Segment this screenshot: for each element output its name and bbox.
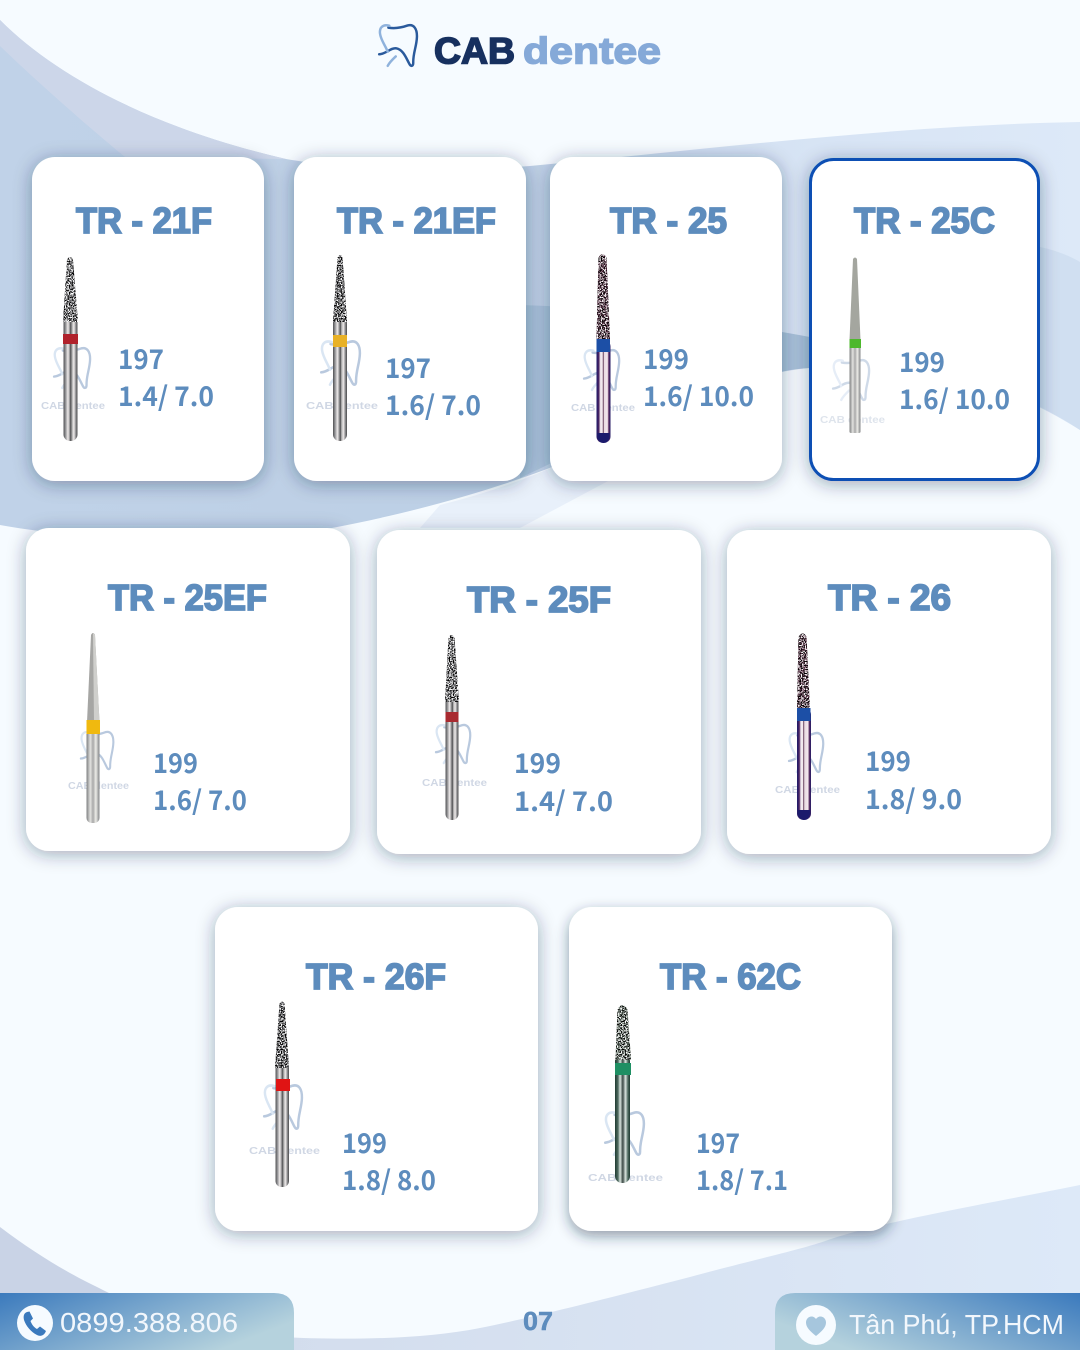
- icon: phone: [17, 1305, 53, 1341]
- specs: [865, 740, 962, 817]
- specs: [514, 742, 613, 819]
- card: TR-25F: [377, 530, 701, 854]
- title: TR - 25EF: [108, 577, 267, 618]
- logo: [379, 25, 661, 72]
- watermark: [775, 733, 840, 796]
- watermark: [820, 360, 885, 426]
- specs: [153, 742, 247, 818]
- specs: 1.8/ 9.0: [865, 778, 962, 817]
- watermark: CAB dentee: [41, 400, 105, 412]
- logo: dentee: [523, 30, 661, 72]
- specs: 1.8/ 7.1: [696, 1159, 788, 1198]
- specs: 197: [118, 338, 164, 377]
- specs: 1.6/ 7.0: [385, 384, 481, 423]
- card: TR-25EF: [26, 528, 350, 851]
- card: TR-62C: [569, 907, 892, 1231]
- bur: [615, 1005, 631, 1183]
- watermark: [588, 1112, 663, 1184]
- card: TR-25: [550, 157, 782, 481]
- specs: 1.4/ 7.0: [514, 780, 613, 819]
- bur: [333, 255, 347, 441]
- bur: [275, 1002, 290, 1187]
- watermark: CAB dentee: [775, 784, 840, 796]
- specs: [696, 1122, 788, 1198]
- icon: tooth logo: [379, 25, 417, 66]
- bur: [797, 634, 811, 820]
- title: TR - 26F: [306, 956, 446, 997]
- bur: [63, 257, 78, 441]
- specs: 197: [696, 1122, 740, 1161]
- specs: 1.8/ 8.0: [342, 1159, 436, 1198]
- watermark: [41, 348, 105, 412]
- bur: [596, 254, 610, 443]
- card: TR-26F: [215, 907, 538, 1231]
- watermark: CAB dentee: [571, 402, 635, 414]
- title: TR - 25C: [854, 200, 995, 241]
- specs: 199: [865, 740, 911, 779]
- specs: [899, 341, 1010, 417]
- title: TR - 25F: [467, 579, 611, 620]
- contact pill: location: [775, 1293, 1080, 1350]
- specs: 1.6/ 10.0: [899, 378, 1010, 417]
- brand name: CAB: [434, 30, 515, 72]
- card: TR-21EF: [294, 157, 526, 481]
- title: TR - 25: [610, 200, 727, 241]
- contact pill: phone: [0, 1293, 294, 1350]
- specs: 197: [385, 347, 431, 386]
- card: TR-21F: [32, 157, 264, 481]
- watermark: [249, 1085, 320, 1157]
- bur: [850, 258, 861, 433]
- title: TR - 21F: [76, 200, 212, 241]
- page number: 07: [523, 1306, 553, 1336]
- watermark: CAB dentee: [820, 414, 885, 426]
- specs: [385, 347, 481, 423]
- watermark: [571, 350, 635, 414]
- specs: 199: [342, 1122, 387, 1161]
- specs: [342, 1122, 436, 1198]
- watermark: CAB dentee: [588, 1172, 663, 1184]
- specs: 199: [153, 742, 198, 781]
- bur: [445, 635, 459, 820]
- watermark: [68, 732, 129, 792]
- title: TR - 62C: [660, 956, 801, 997]
- bur: [86, 633, 100, 823]
- specs: 199: [643, 338, 689, 377]
- watermark: CAB dentee: [68, 780, 129, 792]
- location: Tân Phú, TP.HCM: [849, 1309, 1064, 1340]
- icon: heart: [796, 1305, 836, 1345]
- specs: 199: [899, 341, 945, 380]
- watermark: CAB dentee: [249, 1145, 320, 1157]
- title: TR - 26: [828, 577, 951, 618]
- card: TR-26: [727, 530, 1051, 854]
- specs: [118, 338, 214, 414]
- card: TR-25C highlighted: [810, 160, 1038, 480]
- specs: 1.6/ 7.0: [153, 779, 247, 818]
- specs: 1.4/ 7.0: [118, 375, 214, 414]
- phone number: 0899.388.806: [60, 1307, 238, 1338]
- watermark: CAB dentee: [306, 400, 378, 412]
- watermark: CAB dentee: [422, 777, 487, 789]
- specs: [643, 338, 754, 414]
- specs: 199: [514, 742, 561, 781]
- specs: 1.6/ 10.0: [643, 375, 754, 414]
- title: TR - 21EF: [337, 200, 496, 241]
- watermark: [422, 725, 487, 789]
- watermark: [306, 341, 378, 412]
